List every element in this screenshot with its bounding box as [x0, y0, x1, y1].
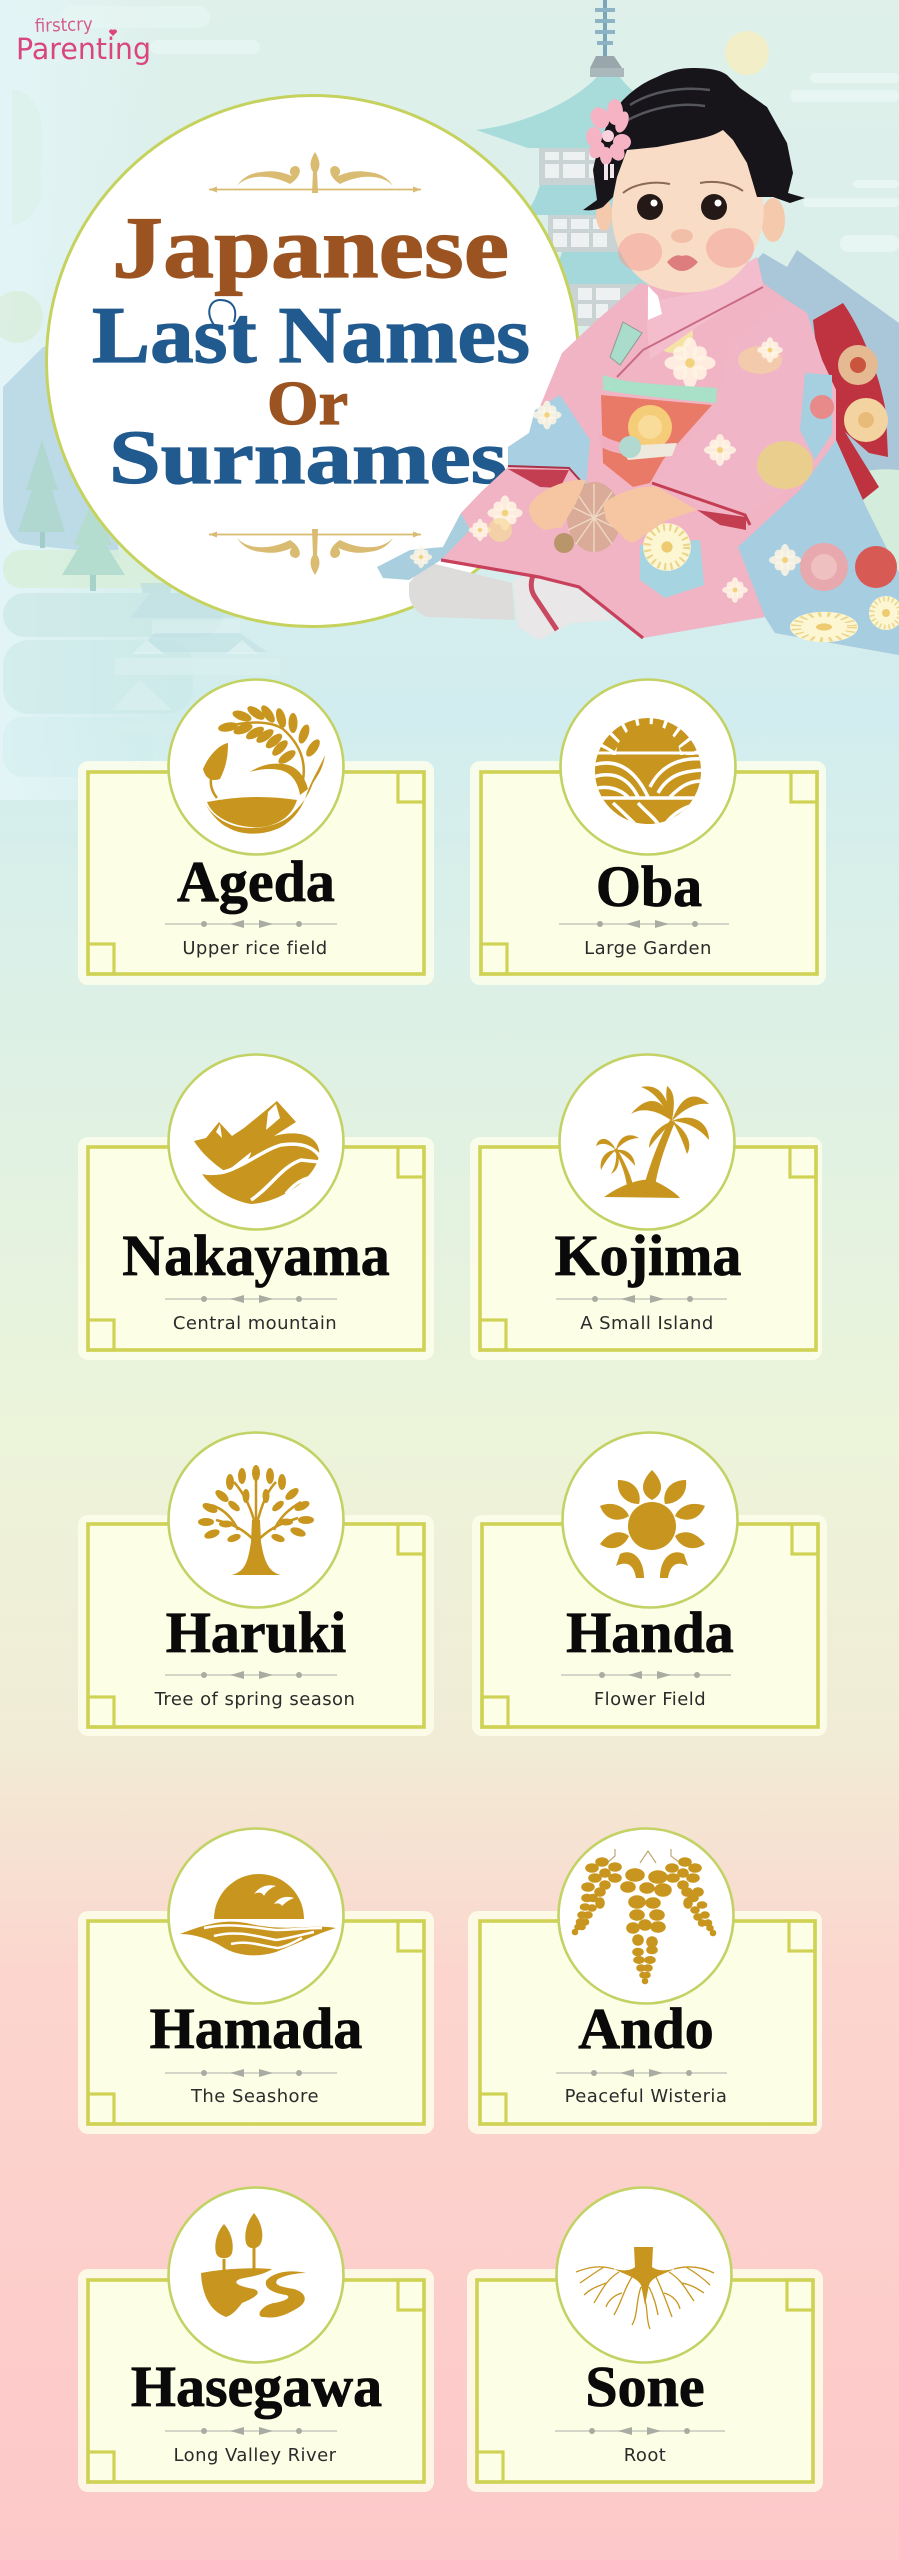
title: Or: Or	[267, 370, 348, 438]
pale castle	[110, 583, 280, 733]
logo	[16, 14, 151, 66]
pine trees	[18, 440, 125, 591]
face	[612, 125, 764, 293]
collar	[647, 257, 763, 360]
meaning: Root: Root	[624, 2445, 666, 2466]
card frame	[472, 1515, 827, 1736]
meaning: The Seashore: The Seashore	[190, 2086, 319, 2107]
icon: seashore	[168, 1828, 344, 2004]
lower right pale hill	[840, 469, 899, 600]
left hills	[0, 291, 223, 777]
card frame	[467, 2269, 823, 2492]
left edge wash	[0, 0, 170, 800]
divider	[165, 2427, 337, 2435]
name: Oba: Oba	[596, 854, 702, 919]
card: Sone	[467, 2188, 823, 2492]
meaning: Central mountain: Central mountain	[173, 1313, 337, 1334]
card: Haruki	[78, 1432, 434, 1736]
meaning: Flower Field: Flower Field	[594, 1689, 706, 1710]
icon: rice field	[168, 680, 344, 854]
card: Ageda	[78, 680, 434, 985]
card frame	[78, 761, 434, 985]
eyebrows	[623, 182, 743, 193]
meaning: Upper rice field: Upper rice field	[182, 938, 328, 959]
divider	[165, 2069, 337, 2077]
meaning: Large Garden: Large Garden	[584, 938, 712, 959]
kimono right sleeve	[652, 300, 836, 530]
cloud bands	[60, 6, 899, 252]
nose and mouth	[667, 229, 698, 271]
card frame	[78, 2269, 434, 2492]
name: Nakayama: Nakayama	[122, 1223, 390, 1288]
card frame	[78, 1515, 434, 1736]
card: Oba	[470, 680, 826, 985]
meaning: Tree of spring season: Tree of spring season	[154, 1689, 355, 1710]
card frame	[470, 1137, 822, 1360]
divider	[561, 1671, 731, 1679]
title: Japanese: Japanese	[112, 200, 509, 297]
sock: right foot	[513, 572, 613, 640]
name: Hamada: Hamada	[150, 1996, 362, 2061]
hands	[529, 480, 697, 543]
ornament: bottom flourish	[209, 529, 421, 575]
obi bow	[813, 303, 888, 503]
divider	[556, 2069, 727, 2077]
obi mint band	[603, 375, 717, 403]
icon: large garden	[560, 680, 736, 854]
icon: valley river	[168, 2188, 344, 2362]
distant mountain: right	[700, 250, 899, 480]
name: Kojima: Kojima	[555, 1223, 741, 1288]
hair	[583, 68, 805, 210]
name: Sone: Sone	[585, 2354, 705, 2419]
card: Ando	[468, 1828, 822, 2134]
kimono left sleeve	[508, 395, 590, 488]
card frame	[78, 1911, 434, 2134]
card: Hasegawa	[78, 2188, 434, 2492]
title circle	[46, 96, 578, 626]
logo: firstcry: firstcry	[34, 14, 93, 37]
icon: tree	[168, 1432, 344, 1608]
skirt blue patch	[640, 540, 704, 598]
divider	[556, 1295, 727, 1303]
illustration: baby in kimono	[377, 68, 899, 655]
temari ball	[554, 482, 621, 553]
eyes	[637, 194, 727, 220]
icon: palm island	[560, 1054, 734, 1230]
name: Handa: Handa	[566, 1600, 734, 1665]
name: Ageda: Ageda	[177, 849, 335, 914]
card frame	[78, 1137, 434, 1360]
ears	[596, 197, 785, 242]
icon: mountain	[168, 1054, 344, 1230]
card: Kojima	[470, 1054, 822, 1360]
title: Surnames: Surnames	[109, 416, 507, 500]
icon: wisteria	[558, 1828, 734, 2004]
mint patch	[610, 322, 642, 365]
card: Nakayama	[78, 1054, 434, 1360]
kimono torso	[610, 257, 763, 389]
hair flower	[586, 99, 631, 180]
divider	[555, 2427, 725, 2435]
card frame	[470, 761, 826, 985]
icon: root	[556, 2188, 732, 2362]
logo: Parenting: Parenting	[16, 32, 151, 66]
title: Last Names: Last Names	[92, 292, 530, 380]
name: Haruki: Haruki	[166, 1600, 346, 1665]
meaning: Peaceful Wisteria: Peaceful Wisteria	[565, 2086, 727, 2107]
skirt left tail	[377, 513, 470, 580]
red hem	[441, 560, 643, 638]
skirt right blue panel	[738, 440, 899, 655]
card frame	[468, 1911, 822, 2134]
hair shine	[628, 89, 710, 120]
divider	[165, 1295, 337, 1303]
p descender curl	[209, 300, 235, 325]
ornament: top flourish	[209, 152, 421, 193]
cheeks	[618, 228, 754, 271]
divider	[559, 920, 729, 928]
card: Hamada	[78, 1828, 434, 2134]
obi sash	[599, 375, 717, 487]
sock: left foot	[409, 562, 515, 620]
sun	[725, 31, 769, 75]
name: Hasegawa: Hasegawa	[131, 2354, 382, 2419]
divider	[165, 920, 337, 928]
pagoda	[476, 0, 734, 326]
meaning: A Small Island: A Small Island	[580, 1313, 714, 1334]
card: Handa	[472, 1432, 827, 1736]
divider	[165, 1671, 337, 1679]
top-left pale blob	[12, 90, 43, 225]
kimono base silhouette	[441, 257, 899, 655]
meaning: Long Valley River: Long Valley River	[174, 2445, 337, 2466]
background scenery	[0, 0, 899, 800]
icon: flower	[562, 1432, 738, 1608]
kimono skirt	[377, 440, 899, 655]
name: Ando: Ando	[578, 1996, 714, 2061]
logo heart	[109, 29, 117, 36]
